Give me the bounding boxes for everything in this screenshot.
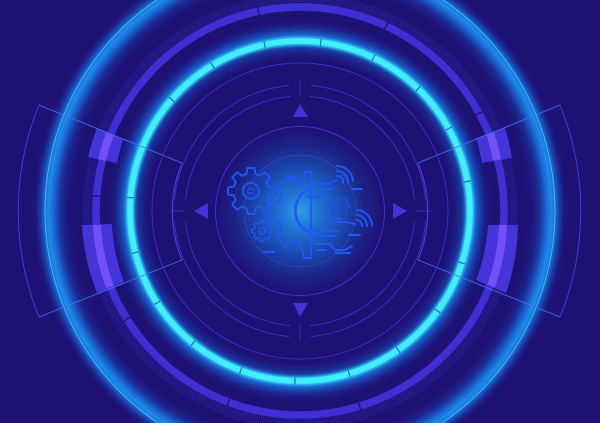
highlight block: upper left bbox=[88, 128, 123, 163]
icon: gears and circuits bbox=[228, 166, 372, 258]
highlight block: lower right bbox=[476, 225, 518, 293]
left bracket frame bbox=[18, 105, 182, 317]
main ring glow bbox=[100, 11, 500, 411]
icon: wifi arcs lower bbox=[357, 210, 372, 226]
arrow: down bbox=[293, 303, 308, 317]
icon: circuit lines bbox=[264, 177, 362, 253]
arrow: left bbox=[194, 203, 208, 219]
icon: small lower gear bbox=[252, 221, 272, 241]
icon: wifi arcs upper bbox=[337, 166, 353, 183]
right bracket frame bbox=[418, 105, 581, 317]
highlight block: lower left bbox=[82, 224, 124, 293]
central glow bbox=[216, 126, 384, 296]
segmented purple ring bbox=[92, 6, 504, 415]
arrow: right bbox=[393, 203, 407, 219]
icon: central half gear bbox=[268, 172, 311, 258]
crosshair ticks bbox=[170, 80, 431, 341]
icon: large left gear bbox=[228, 168, 274, 214]
inner concentric arcs bbox=[152, 63, 448, 359]
main cyan segmented ring bbox=[127, 39, 471, 384]
highlight block: upper right bbox=[476, 128, 512, 163]
tick marks ring bbox=[88, 0, 512, 423]
arrow: up bbox=[293, 104, 308, 117]
icon: small right gear bbox=[329, 196, 349, 216]
